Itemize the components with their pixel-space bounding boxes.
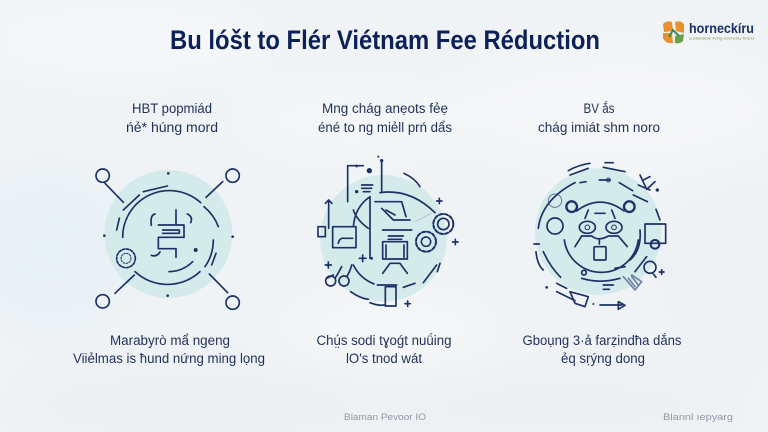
column 2 caption: lO's tnod wát — [346, 351, 422, 366]
column 1 caption — [73, 333, 265, 366]
column 3 heading: chág imiát shm noro — [538, 120, 660, 135]
footer note right: Blannl ıepyarg — [663, 412, 733, 423]
column 3 heading — [538, 101, 660, 135]
icon: logo mark — [663, 21, 684, 43]
column 1 heading: HBT popmiád — [132, 101, 212, 116]
footer note center: Blaman Pevoor IO — [344, 412, 426, 423]
column 1 heading: ńẻ* húng mord — [126, 120, 218, 135]
column 2 heading — [318, 101, 452, 135]
column 2 heading: Mng chág anẹots fẻẹ — [322, 101, 448, 116]
icon: network hub — [96, 169, 239, 309]
column 3 caption: Gboụng 3·ả farẓindħa dắns — [522, 333, 682, 348]
column 1 caption: Marabyrò mẩ ngeng — [110, 333, 230, 348]
column 1 caption: Viiẻlmas is ħund nứng ming lọng — [73, 351, 265, 366]
column 3 heading: BV ắs — [584, 101, 615, 116]
column 2 caption: Chṳ́s sodi tɣoǵt nuǘing — [316, 333, 452, 348]
column 3 caption: ẻq sṛýng dong — [561, 351, 645, 366]
column 2 heading: éné to ng miẻll prń dẩs — [318, 120, 452, 135]
title: Bu lóšt to Flér Viétnam Fee Réduction — [170, 25, 600, 55]
logo — [663, 21, 754, 43]
icon: robot face — [534, 163, 666, 309]
icon: workflow tools — [318, 156, 458, 306]
column 1 heading — [126, 101, 218, 135]
column 2 caption — [316, 333, 452, 366]
logo wordmark: horneckíru — [689, 21, 754, 36]
logo tagline: sustainable living everyday brand — [689, 36, 754, 40]
column 3 caption — [522, 333, 682, 366]
